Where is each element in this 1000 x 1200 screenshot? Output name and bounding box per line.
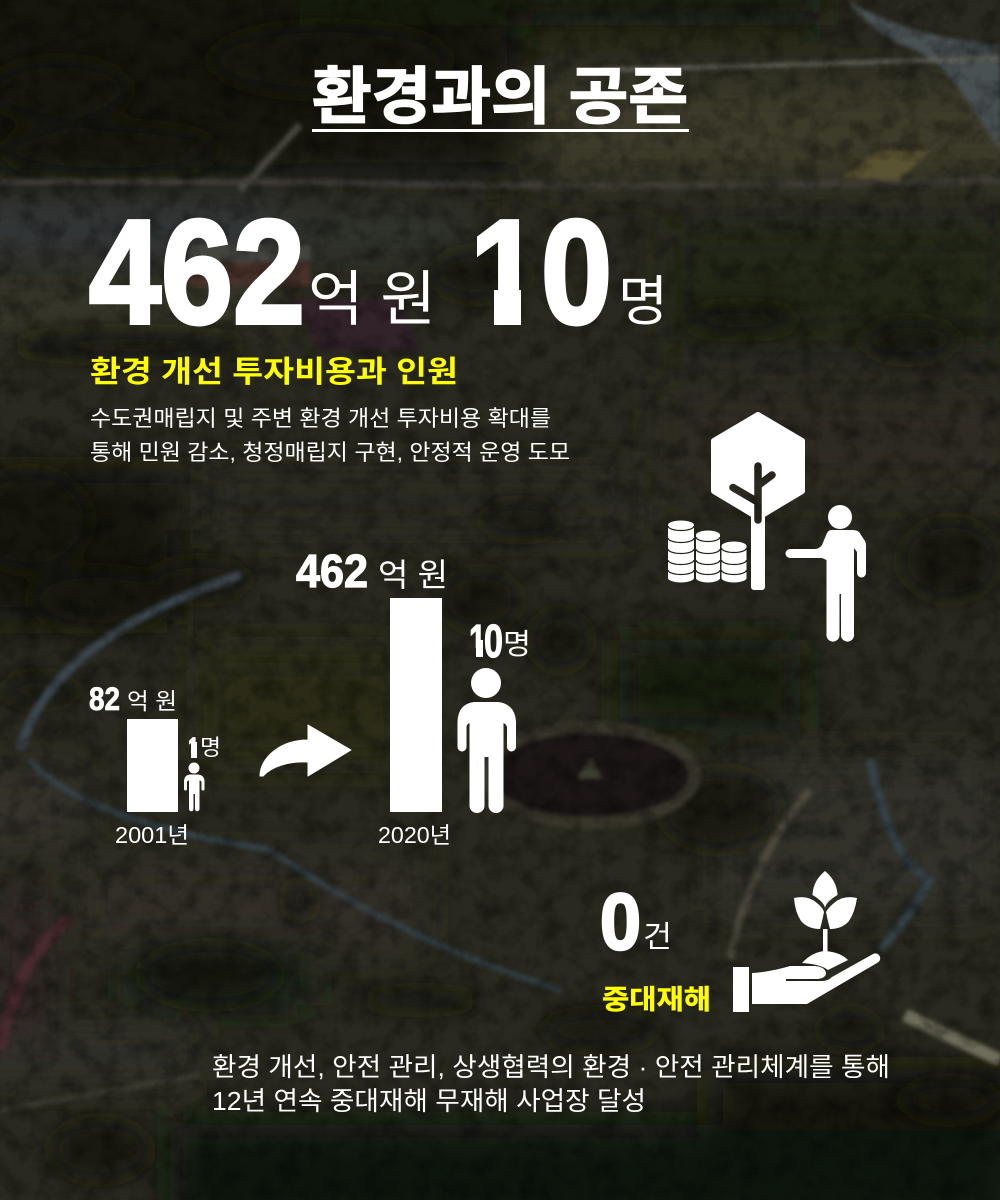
stat: 0건: 건 — [643, 921, 672, 954]
closing text: 12년 연속 중대재해 무재해 사업장 달성 — [212, 1086, 646, 1116]
closing text — [212, 1052, 890, 1116]
stat: 0건 — [600, 877, 672, 966]
description text: 수도권매립지 및 주변 환경 개선 투자비용 확대를 — [90, 406, 551, 431]
label: 1명 — [189, 736, 218, 758]
icon: tree — [714, 415, 802, 587]
icon: plant in hand — [733, 871, 880, 1012]
stat: 462억 원: 462 — [89, 190, 305, 355]
heading: investment: 환경 개선 투자비용과 인원 — [90, 356, 458, 389]
digit 1 with its foot clipped; stem continued below as a plain bar: 1 — [470, 190, 541, 355]
icon: tree, coins and person — [668, 415, 866, 642]
label: 10명: 0 — [484, 615, 503, 667]
icon: large person — [458, 668, 516, 813]
label: 10명 — [470, 624, 528, 658]
chart: 2020 — [296, 545, 531, 848]
stat: 0건: 0 — [600, 877, 641, 966]
label: 2001: 2001년 — [115, 822, 189, 848]
label: 462억 원 — [296, 545, 448, 597]
icon: person pointing — [786, 505, 866, 642]
label: 1명: 1 — [188, 732, 199, 765]
icon: small person — [184, 762, 205, 811]
label: 10명: 명 — [503, 629, 531, 661]
stat: 462억 원: 억 원 — [308, 266, 436, 333]
stat: 10명 — [477, 218, 662, 326]
label: 462억 원: 억 원 — [378, 557, 448, 593]
icon: stem — [823, 929, 828, 953]
stat: 10명: 0 — [541, 190, 612, 355]
label: 82억 원 — [89, 681, 177, 717]
stat: 10명: 명 — [618, 272, 668, 332]
label: 82억 원: 82 — [89, 681, 120, 717]
icon: coins — [668, 520, 746, 582]
digit 1 with its foot clipped; stem continued below as a plain bar — [477, 219, 521, 325]
bar: 2001 — [127, 719, 178, 812]
chart: 2001 — [89, 681, 221, 848]
label: 462억 원: 462 — [296, 545, 368, 597]
description text — [90, 406, 570, 465]
label: 1명: 명 — [200, 735, 221, 760]
bar: 2020 — [390, 598, 442, 812]
label: 2020: 2020년 — [378, 822, 451, 848]
icon: hand — [752, 953, 880, 1004]
icon: soil mound — [802, 951, 848, 970]
label: 10명: 1 — [469, 615, 486, 667]
description text: 통해 민원 감소, 청정매립지 구현, 안정적 운영 도모 — [90, 440, 570, 465]
arrow — [260, 725, 351, 776]
closing text: 환경 개선, 안전 관리, 상생협력의 환경 · 안전 관리체계를 통해 — [212, 1052, 890, 1082]
heading: 중대재해: 중대재해 — [602, 985, 711, 1015]
title: 환경과의 공존 — [312, 63, 688, 132]
label: 82억 원: 억 원 — [127, 688, 177, 714]
icon: cuff — [733, 967, 749, 1012]
icon: leaves — [794, 871, 857, 929]
